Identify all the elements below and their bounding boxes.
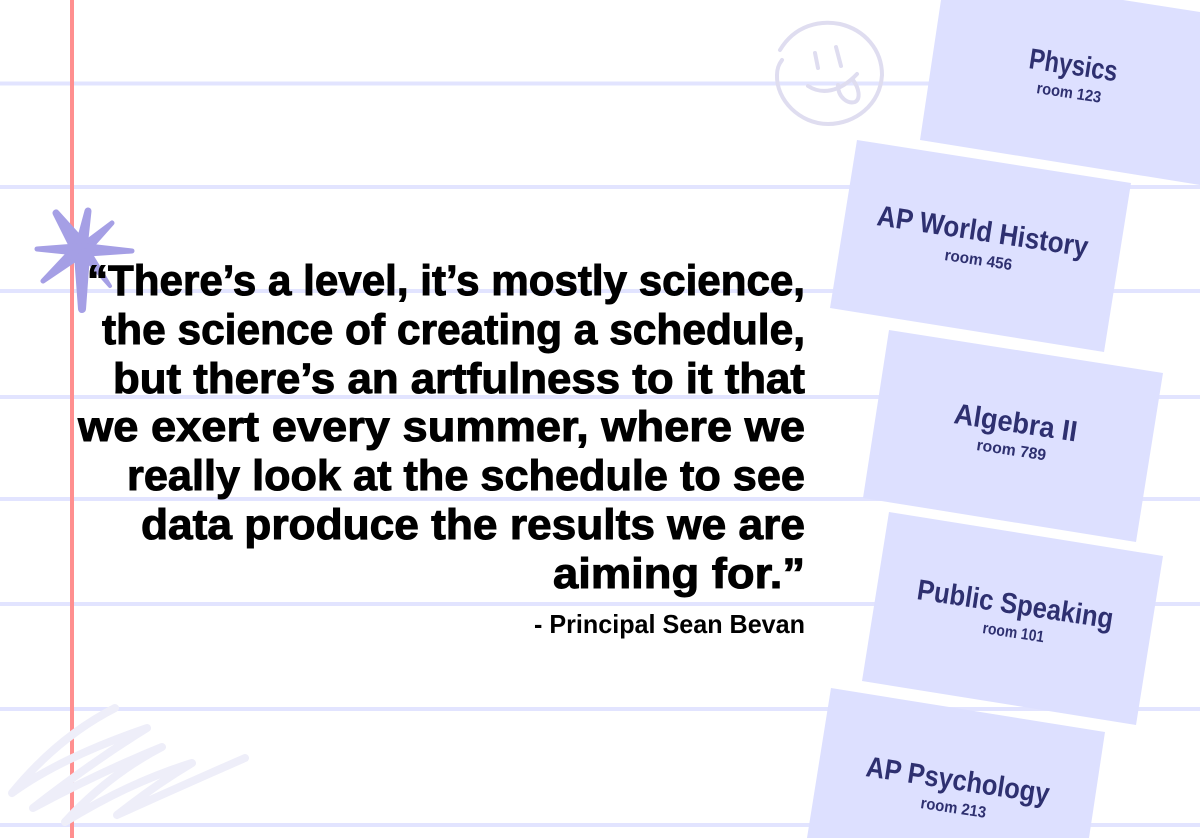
- star doodle: [37, 211, 132, 309]
- card: Algebra II: room 789: [975, 437, 1047, 464]
- card: Public Speaking: [862, 512, 1163, 725]
- card: Physics: Physics: [1027, 43, 1120, 88]
- quote text: aiming for.”: [553, 550, 805, 598]
- card: Physics: [920, 0, 1200, 185]
- quote text: really look at the schedule to see: [127, 452, 805, 500]
- scribble doodle: [12, 708, 245, 822]
- quote text: “There’s a level, it’s mostly science,: [87, 257, 805, 305]
- quote attribution: - Principal Sean Bevan: [534, 609, 805, 639]
- quote text: [77, 257, 805, 598]
- card: Algebra II: [863, 330, 1163, 542]
- quote text: but there’s an artfulness to it that: [113, 355, 805, 403]
- quote text: the science of creating a schedule,: [102, 306, 805, 354]
- notebook margin line: [70, 0, 74, 838]
- card: AP World History: AP World History: [875, 200, 1090, 264]
- card: AP World History: room 456: [943, 247, 1013, 274]
- card: Public Speaking: room 101: [981, 620, 1045, 646]
- quote text: we exert every summer, where we: [77, 403, 805, 451]
- card: AP World History: [830, 140, 1131, 352]
- card: AP Psychology: room 213: [919, 795, 987, 822]
- card: AP Psychology: AP Psychology: [864, 751, 1052, 811]
- card: Public Speaking: Public Speaking: [915, 574, 1116, 636]
- quote text: data produce the results we are: [141, 501, 805, 549]
- smiley face doodle: [777, 23, 882, 124]
- card: AP Psychology: [807, 688, 1105, 838]
- card: Algebra II: Algebra II: [952, 398, 1079, 448]
- card: Physics: room 123: [1035, 80, 1102, 107]
